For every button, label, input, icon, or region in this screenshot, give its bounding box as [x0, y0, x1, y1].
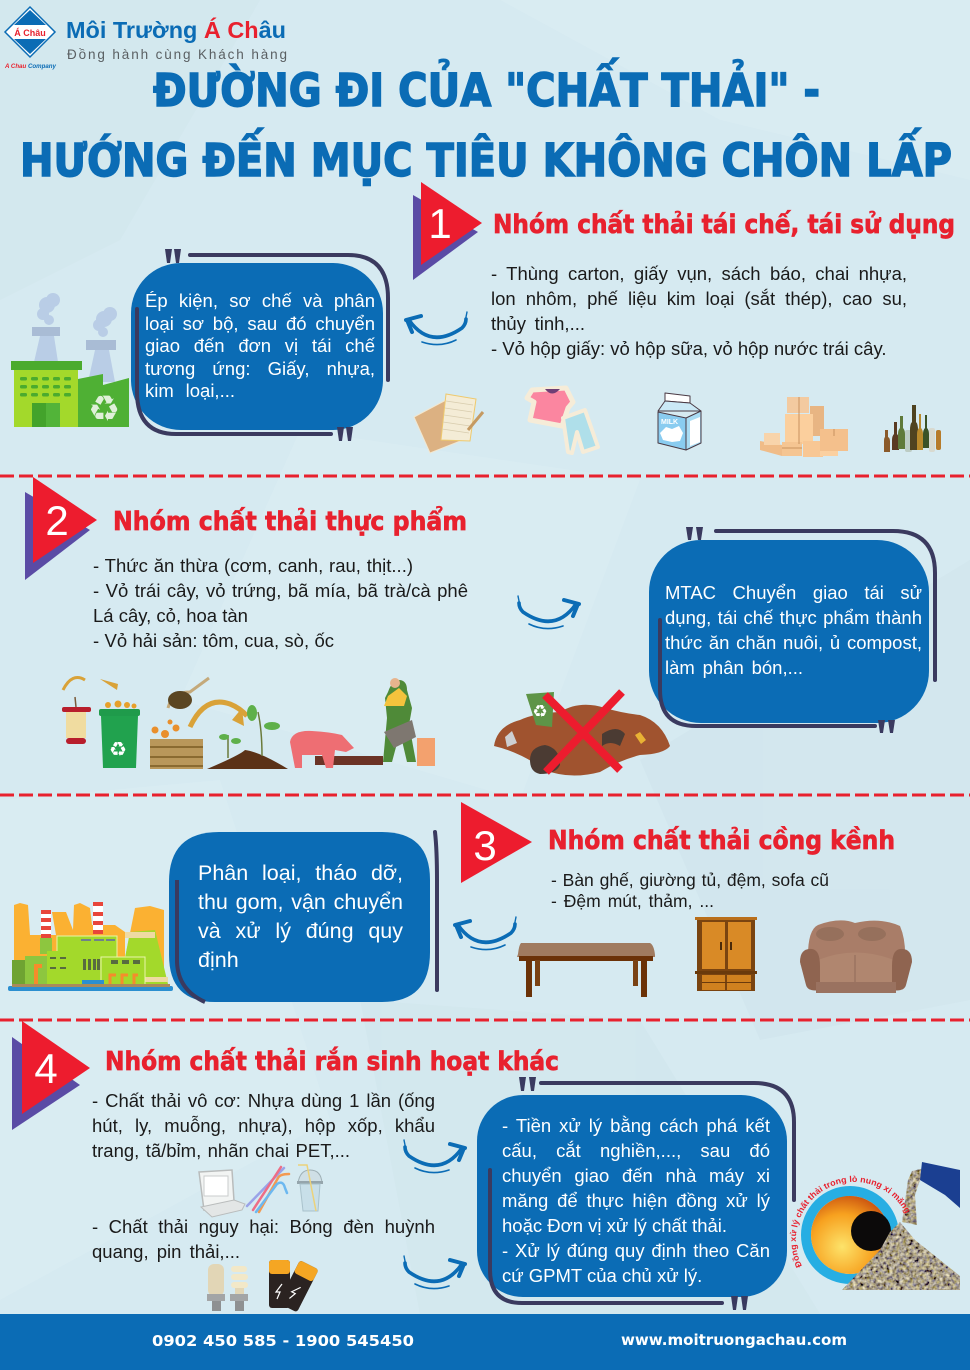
text: bubble 4: cấu, cắt nghiền,..., sau đó [502, 1140, 770, 1161]
number badge 1: 1 [428, 200, 452, 247]
panel: bubble 4 [477, 1077, 794, 1310]
text: bubble 1: giao đến đơn vị tái chế [145, 335, 375, 356]
text: bubble 4: măng để thực hiện đồng xử lý [502, 1190, 770, 1211]
arrow 4a [404, 1140, 465, 1173]
text: bubble 3 [198, 861, 403, 972]
icon: table [517, 943, 655, 997]
text: bubble 1: Ép kiện, sơ chế và phân [145, 290, 375, 311]
icon: industrial plant [8, 902, 173, 991]
icon: food waste cycle: ♻ [109, 737, 127, 761]
text: group 3 items [551, 870, 829, 911]
title [20, 58, 952, 187]
text: bubble 4 [502, 1115, 770, 1286]
icon: clothes [527, 388, 598, 453]
text: bubble 1: loại sơ bộ, sau đó chuyển [145, 312, 375, 334]
text: bubble 2: dụng, tái chế thực phẩm thành [665, 607, 922, 628]
text: bubble 1: tương ứng: Giấy, nhựa, [145, 358, 375, 378]
text: group 1 items [491, 263, 907, 359]
icon: recycling factory: ♻ [88, 389, 120, 430]
icon: foam box [199, 1170, 245, 1217]
text: group 4 hazardous [92, 1216, 435, 1262]
text: group 1 items: - Thùng carton, giấy vụn, sách báo, chai nhựa, [491, 263, 907, 284]
number badge 3 [461, 802, 532, 883]
icon: landfill crossed out [494, 692, 670, 776]
text: bubble 1 [145, 290, 375, 401]
footer bar: 0902 450 585 - 1900 545450 [152, 1332, 414, 1350]
heading 4: Nhóm chất thải rắn sinh hoạt khác [105, 1046, 559, 1077]
text: bubble 3: định [198, 948, 239, 972]
number badge 4 [12, 1021, 90, 1130]
icon: cardboard boxes [760, 397, 848, 457]
text: group 4 inorganic [92, 1090, 435, 1161]
number badge 3: 3 [473, 822, 497, 869]
icon: milk carton [658, 393, 701, 450]
logo: Á Châu: Á Châu [14, 28, 46, 38]
text: group 2 items [93, 555, 468, 651]
text: group 2 items: - Vỏ trái cây, vỏ trứng, bã mía, bã trà/cà phê [93, 580, 468, 601]
icon: recycling factory [11, 293, 129, 430]
text: bubble 3: và xử lý đúng quy [198, 919, 403, 943]
icon: glass bottles [884, 405, 941, 452]
text: bubble 4: cứ GPMT của chủ xử lý. [502, 1265, 702, 1286]
text: bubble 4: - Tiền xử lý bằng cách phá kết [502, 1115, 770, 1136]
text: bubble 2: thức ăn chăn nuôi, ủ compost, [665, 632, 922, 653]
arrow 3 [455, 917, 516, 950]
text: group 2 items: - Thức ăn thừa (cơm, canh, rau, thịt...) [93, 555, 413, 576]
arrow 1 [406, 312, 467, 345]
panel: bubble 1 [131, 249, 388, 441]
icon: straws [247, 1167, 289, 1212]
number badge 2 [25, 477, 97, 580]
text: group 3 items: - Bàn ghế, giường tủ, đệm, sofa cũ [551, 870, 829, 890]
logo: Á Châu: Môi Trường Á Châu [66, 16, 286, 43]
text: bubble 2 [665, 582, 922, 678]
icon: food waste cycle [62, 678, 435, 769]
heading 2: Nhóm chất thải thực phẩm [113, 504, 467, 537]
logo: Á Châu: A Chau Company [4, 63, 56, 70]
number badge 4: 4 [34, 1045, 58, 1092]
text: group 1 items: lon nhôm, phế liệu kim loại (sắt thép), cao su, [491, 288, 907, 309]
logo: Á Châu [4, 7, 287, 70]
text: group 4 hazardous: quang, pin thải,... [92, 1241, 240, 1262]
text: bubble 4: - Xử lý đúng quy định theo Căn [502, 1240, 770, 1261]
text: group 4 inorganic: trang, tã/bỉm, nhãn chai PET,... [92, 1140, 350, 1161]
text: bubble 3: Phân loại, tháo dỡ, [198, 861, 403, 885]
text: group 4 inorganic: hút, ly, muỗng, nhựa), hộp xốp, khẩu [92, 1115, 435, 1136]
footer bar [0, 1314, 970, 1370]
text: bubble 3: thu gom, vận chuyển [198, 890, 403, 914]
icon: batteries [269, 1260, 319, 1312]
text: group 2 items: - Vỏ hải sản: tôm, cua, sò, ốc [93, 630, 334, 651]
text: group 1 items: - Vỏ hộp giấy: vỏ hộp sữa, vỏ hộp nước trái cây. [491, 338, 886, 359]
icon: wardrobe [695, 917, 757, 991]
text: bubble 4: chuyển giao đến nhà máy xi [502, 1165, 770, 1186]
title: ĐƯỜNG ĐI CỦA "CHẤT THẢI" - [153, 58, 820, 117]
icon: notebook [414, 394, 483, 453]
text: bubble 2: MTAC Chuyển giao tái sử [665, 582, 922, 603]
text: group 4 hazardous: - Chất thải nguy hại: Bóng đèn huỳnh [92, 1216, 435, 1237]
number badge 1 [413, 182, 482, 280]
text: group 3 items: - Đệm mút, thảm, ... [551, 891, 714, 911]
divider lines [0, 476, 970, 1020]
icon: milk carton: MILK [661, 419, 678, 426]
text: group 2 items: Lá cây, cỏ, hoa tàn [93, 605, 248, 626]
arrow 2 [518, 596, 579, 629]
icon: sofa [800, 920, 912, 993]
icon: light bulbs [207, 1264, 248, 1311]
icon: plastic cup [297, 1165, 323, 1211]
icon: cement kiln co-processing [790, 1162, 960, 1290]
text: bubble 4: hoặc Đơn vị xử lý chất thải. [502, 1215, 727, 1236]
icon: landfill crossed out: ♻ [532, 702, 548, 722]
arrow 4b [404, 1256, 465, 1289]
text: bubble 2: làm phân bón,... [665, 657, 803, 678]
icon: cement kiln co-processing: Đồng xử lý chất thải trong lò nung xi măng [790, 1176, 910, 1268]
text: bubble 1: kim loại,... [145, 380, 235, 401]
footer bar: www.moitruongachau.com [621, 1331, 847, 1349]
number badge 2: 2 [45, 497, 69, 544]
panel: bubble 2 [649, 527, 935, 733]
logo: Á Châu: Đồng hành cùng Khách hàng [67, 47, 287, 62]
text: group 1 items: thủy tinh,... [491, 313, 585, 334]
text: group 4 inorganic: - Chất thải vô cơ: Nhựa dùng 1 lần (ống [92, 1090, 435, 1111]
panel: bubble 3 [169, 832, 437, 1002]
heading 3: Nhóm chất thải cồng kềnh [548, 825, 895, 856]
